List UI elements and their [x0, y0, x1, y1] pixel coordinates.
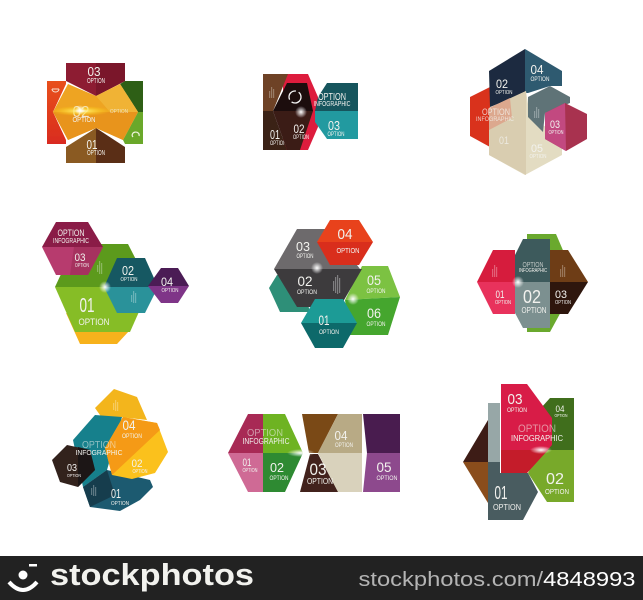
panel: brown top — [302, 414, 338, 453]
footer bar — [0, 556, 643, 600]
infographic 8: horizontal chain — [228, 414, 400, 492]
panel: 02 light green: OPTION — [545, 487, 569, 496]
icon: bars — [492, 265, 497, 277]
panel: wine hexagon: OPTION — [75, 263, 89, 269]
title: option infographic — [511, 423, 563, 443]
panel: 02 light green: 02 — [546, 471, 564, 488]
panel: gray hexagon — [528, 86, 570, 132]
panel: 04 dark green: 04 — [556, 404, 564, 414]
panel: 02 navy: 02 — [496, 77, 508, 91]
panel: black hexagon — [273, 83, 313, 111]
infographic 6: three columns — [477, 234, 588, 332]
panel: 01 dark blue: OPTION — [111, 501, 129, 507]
label: 03 option: 03 — [328, 118, 340, 133]
all infographic groups — [42, 49, 588, 520]
infographic 4: hexagon cluster — [42, 222, 189, 344]
panel: 03 red — [501, 384, 552, 473]
panel: wine hexagon: OPTION — [58, 228, 85, 239]
panel: yellow back — [66, 313, 130, 344]
panel: 02 green: 02 — [270, 460, 284, 475]
panel: 02 centre: 02 — [72, 104, 90, 121]
infographic 3: overlapping hexagons — [470, 49, 587, 175]
infographic 5: six hexagons — [269, 220, 400, 348]
label: 03 option: OPTION — [328, 132, 344, 138]
panel: cream: 01 — [499, 135, 509, 147]
panel: 01 green — [55, 244, 150, 332]
panel: 01 teal: 01 — [318, 312, 330, 328]
icon: bars — [91, 485, 96, 496]
icon: bars — [113, 400, 118, 411]
panel: 01 teal: OPTION — [319, 329, 339, 336]
panel: 02 teal: 02 — [122, 263, 134, 278]
panel: 01 gray — [488, 403, 538, 520]
panel: 01 pink — [228, 414, 263, 492]
panel: 01 pink: 01 — [242, 457, 252, 469]
title: option infographic — [76, 440, 123, 457]
panel: 04 blue — [525, 49, 562, 93]
panel: 03 dark hexagon — [52, 445, 95, 487]
panel: 02 green: OPTION — [270, 475, 289, 482]
panel: 03 dark brown: 03 — [310, 460, 326, 479]
infographic 2: option infographic with rotating arrows — [263, 74, 358, 150]
panel: 04 02 orange hexagon — [105, 417, 168, 479]
panel: 01 dark blue — [83, 470, 153, 511]
panel: cream: OPTION — [530, 154, 547, 160]
highlight: centre glow — [51, 105, 111, 116]
icon: bars — [269, 87, 274, 98]
title: option infographic: OPTION — [247, 428, 283, 439]
panel: 04 cream: OPTION — [335, 443, 353, 449]
panel: teal back — [269, 275, 310, 312]
panel: 02 centre: OPTION — [72, 117, 96, 124]
panel: 01 gray: OPTION — [493, 502, 521, 512]
panel: 02 light green — [528, 450, 574, 502]
title: option infographic: OPTION — [482, 107, 510, 117]
highlight: glow — [311, 262, 359, 305]
highlight: glow — [287, 449, 315, 457]
highlight: glow — [512, 276, 524, 288]
panel: 02 gray: OPTION — [522, 305, 546, 315]
highlight: glow — [99, 281, 111, 293]
panel: 01 dark — [263, 111, 287, 150]
panel: wine hexagon: 03 — [74, 252, 86, 264]
panel: 01 dark blue: 01 — [111, 486, 121, 501]
panel: 03 top — [66, 63, 125, 96]
highlight: glow — [295, 106, 307, 118]
panel: 02 navy: OPTION — [496, 90, 513, 96]
panel: 04 02 orange hexagon: 04 — [122, 417, 136, 433]
panel: teal bottom 03 — [315, 111, 358, 139]
title: option infographic — [242, 428, 290, 446]
panel: 02 dark — [274, 269, 362, 307]
panel: 04 dark green — [541, 398, 574, 450]
icon: rotating arrows — [289, 91, 301, 103]
title: option infographic: INFOGRAPHIC — [76, 448, 123, 457]
panel: 03 red: OPTION — [507, 407, 527, 414]
label: 03 option — [328, 118, 344, 138]
panel: 03 gray: 03 — [296, 239, 310, 254]
title: option infographic: INFOGRAPHIC — [314, 99, 351, 108]
icon: bars — [534, 107, 539, 118]
title: option infographic: INFOGRAPHIC — [476, 116, 514, 123]
panel: 03 brown — [550, 250, 588, 314]
panel: 03 dark brown — [300, 454, 338, 492]
icon: smile logo — [9, 564, 37, 590]
panel: 01 dark: 01 — [270, 127, 280, 142]
panel: 03 pink: OPTION — [548, 130, 564, 136]
panel: 01 red: OPTION — [495, 300, 511, 306]
panel: wine hexagon: INFOGRAPHIC — [53, 238, 89, 245]
panel: 04 purple — [148, 268, 189, 303]
panel: 01 bottom: OPTION — [87, 150, 105, 157]
panel: 03 dark hexagon: 03 — [67, 463, 77, 474]
panel: 05 purple: OPTION — [376, 475, 398, 482]
panel: 01 gray: 01 — [494, 483, 508, 503]
panel: red — [283, 74, 318, 150]
panel: red left — [470, 87, 490, 147]
logo text: stockphotos — [50, 557, 254, 592]
panel: 02 gray: INFOGRAPHIC — [519, 268, 547, 274]
panel: 03 top: 03 — [88, 64, 100, 79]
panel: teal — [73, 415, 122, 487]
panel: 03 brown: 03 — [555, 289, 567, 301]
panel: 05 green — [345, 266, 400, 300]
icon: bars — [131, 291, 136, 303]
panel: 02 dark: OPTION — [297, 289, 317, 296]
panel: 04 02 orange hexagon: OPTION — [122, 433, 142, 440]
infographic 7: tilted hexagons — [52, 389, 168, 511]
panel: 06 green — [345, 297, 400, 335]
panel: 03 red: 03 — [508, 391, 522, 408]
highlight: glow — [530, 446, 552, 454]
panel: yellow top — [95, 389, 147, 432]
panel: cream: 05 — [531, 143, 543, 155]
panel: 03 pink — [545, 103, 587, 151]
infographic 1: cross layout — [47, 63, 143, 163]
panel: 04 cream: 04 — [334, 428, 348, 443]
title: option infographic: INFOGRAPHIC — [511, 433, 563, 443]
panel: 04 blue: 04 — [530, 62, 544, 77]
icon: bars — [333, 275, 340, 294]
panel: 02 centre: OPTION — [110, 109, 128, 115]
panel: 01 teal — [301, 299, 357, 348]
panel: left red — [47, 81, 66, 144]
panel: 03 dark hexagon: OPTION — [67, 473, 81, 478]
panel: 05 green: OPTION — [366, 288, 386, 295]
title: option infographic — [476, 107, 514, 123]
panel: green back — [527, 234, 565, 332]
panel: 02 green — [263, 414, 303, 492]
panel: right green — [120, 81, 143, 144]
panel: wine hexagon — [42, 222, 103, 275]
infographic 9: vertical stack — [463, 384, 574, 520]
panel: 04 purple: 04 — [161, 275, 173, 289]
icon: bars — [97, 261, 102, 274]
title: option infographic: OPTION — [82, 440, 116, 451]
panel: 01 red — [477, 250, 515, 314]
panel: 01 pink: OPTION — [242, 468, 258, 474]
panel: 01 red: 01 — [496, 289, 504, 301]
panel: 04 orange — [317, 220, 373, 265]
panel: teal top — [315, 83, 358, 111]
panel: 03 pink: 03 — [550, 119, 560, 131]
panel: 05 purple — [363, 414, 400, 492]
panel: 01 green: OPTION — [78, 317, 110, 328]
panel: 02 gray: 02 — [523, 287, 541, 307]
panel: 04 purple: OPTION — [162, 288, 179, 294]
panel: 03 dark brown: OPTION — [307, 476, 333, 486]
panel: brown top left — [263, 74, 288, 111]
panel: 02 dark: OPTION — [293, 135, 309, 141]
icon: left arrow — [52, 89, 59, 92]
panel: 03 brown: OPTION — [555, 300, 571, 306]
panel: 04 cream — [318, 414, 362, 492]
panel: 01 bottom: 01 — [86, 137, 98, 152]
panel: 02 gray: OPTION — [522, 262, 544, 269]
title: option infographic — [314, 92, 351, 108]
panel: cream — [489, 91, 562, 175]
panel: 03 top: OPTION — [87, 78, 105, 85]
panel: 06 green: 06 — [367, 305, 381, 321]
panel: 01 dark: OPTION — [270, 141, 286, 147]
panel: 02 navy — [489, 49, 525, 107]
title: option infographic: OPTION — [518, 423, 556, 435]
panel: 04 02 orange hexagon: OPTION — [132, 469, 148, 475]
title: option infographic: INFOGRAPHIC — [242, 437, 290, 446]
panel: 02 dark — [273, 111, 313, 150]
image url text: stockphotos.com/ 4848993 — [358, 569, 636, 591]
panel: 02 dark: 02 — [294, 122, 305, 136]
panel: 04 blue: OPTION — [530, 77, 550, 83]
panel: brown left — [463, 420, 488, 503]
panel: 04 orange: 04 — [338, 226, 352, 243]
panel: 04 02 orange hexagon: 02 — [132, 458, 142, 470]
panel: 04 dark green: OPTION — [554, 413, 568, 418]
panel: 01 bottom — [66, 128, 125, 163]
icon: right arrow — [132, 132, 139, 137]
panel: 03 gray: OPTION — [296, 254, 314, 260]
panel: 02 gray — [515, 239, 550, 328]
title: option infographic: OPTION — [318, 92, 346, 103]
panel: 05 green: 05 — [367, 272, 381, 288]
panel: 06 green: OPTION — [366, 321, 386, 328]
panel: 03 gray — [274, 229, 360, 269]
panel: 01 green: 01 — [80, 295, 94, 317]
panel: 04 orange: OPTION — [336, 246, 360, 255]
panel: 05 purple: 05 — [376, 459, 392, 475]
panel: 02 dark: 02 — [298, 273, 313, 289]
panel: 02 teal: OPTION — [120, 277, 138, 283]
panel: 02 centre — [53, 84, 138, 140]
icon: bars — [560, 265, 565, 277]
panel: 02 teal — [104, 258, 158, 313]
